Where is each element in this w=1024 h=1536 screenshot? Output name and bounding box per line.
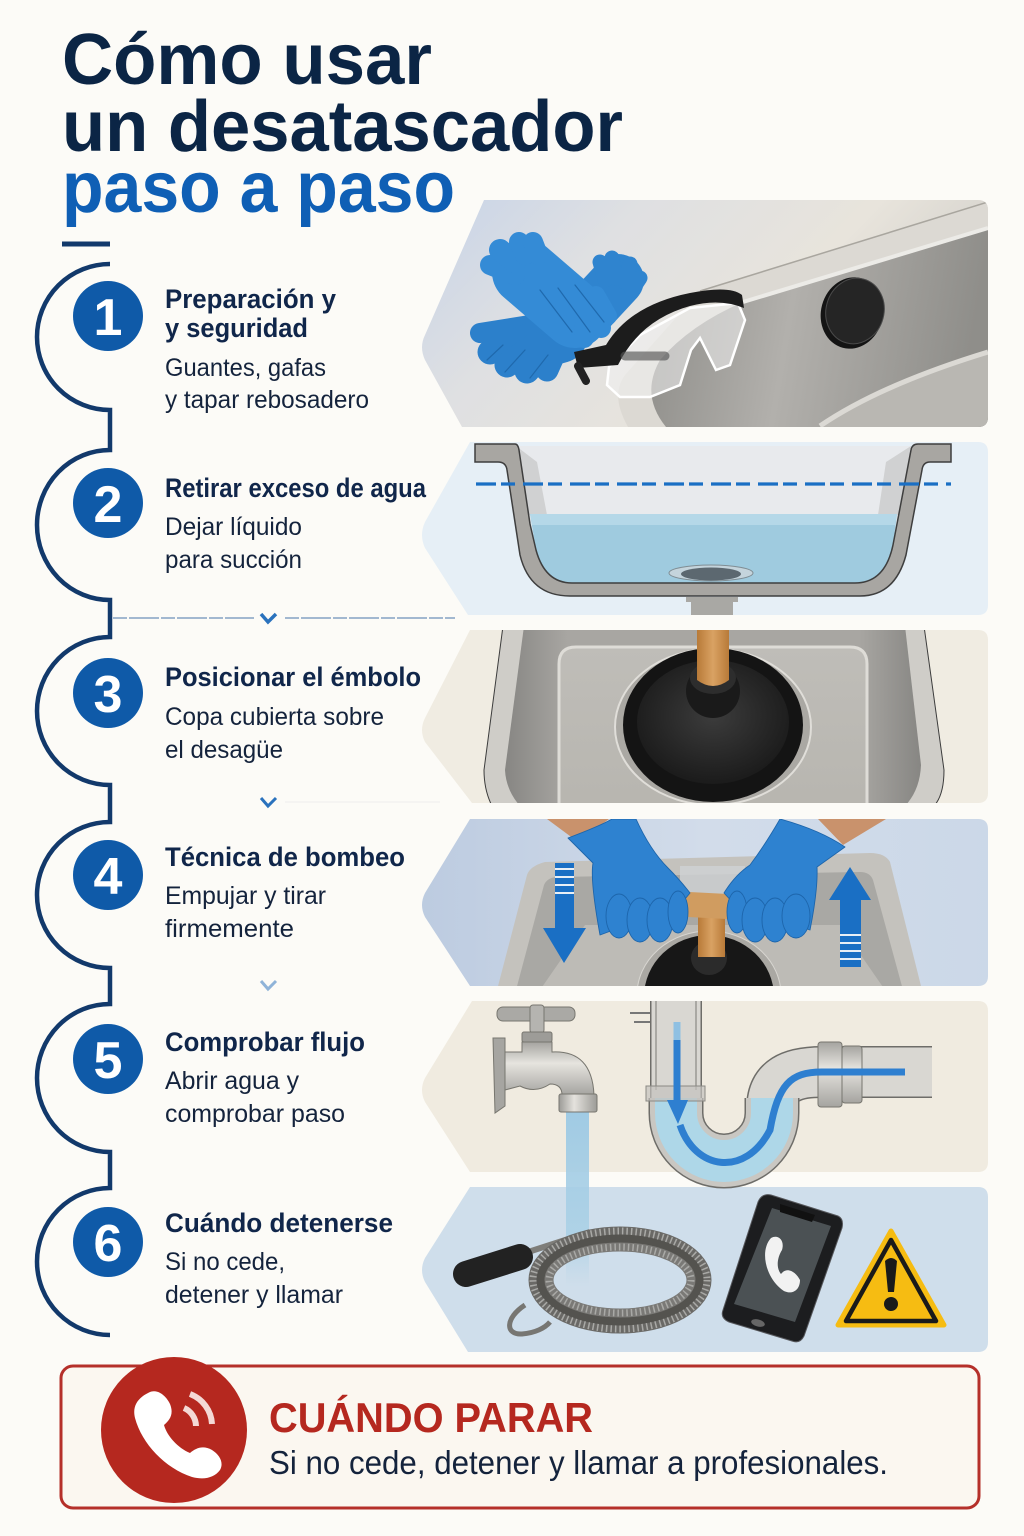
skin forearms (547, 819, 886, 845)
step 2 text: Dejar líquido (165, 513, 302, 541)
step 4 (73, 840, 405, 943)
push arrow (543, 863, 586, 963)
step 3 text: Posicionar el émbolo (165, 662, 421, 692)
step 6 text: detener y llamar (165, 1281, 343, 1309)
panel 4: pumping technique (422, 819, 988, 986)
step 6 text: Cuándo detenerse (165, 1208, 393, 1238)
step 6 text (165, 1208, 393, 1309)
title: Cómo usar (62, 20, 432, 100)
title: un desatascador (62, 87, 623, 167)
number badge 5: 5 (94, 1032, 122, 1090)
step 5 (73, 1024, 365, 1128)
steel sink (484, 630, 944, 803)
number badge 1: 1 (94, 289, 122, 347)
number badge 4: 4 (94, 848, 123, 906)
warning triangle (838, 1231, 944, 1325)
smartphone (722, 1195, 842, 1342)
step 5 text: Abrir agua y (165, 1067, 299, 1095)
icon: phone in red circle (101, 1357, 247, 1503)
step 2 (73, 468, 427, 574)
step 6 (73, 1207, 393, 1309)
number badge 5 (73, 1024, 143, 1094)
step 4 text: Empujar y tirar (165, 882, 326, 910)
step 3 text: Copa cubierta sobre (165, 703, 384, 731)
gloved hands (568, 819, 845, 942)
number badge 6: 6 (94, 1215, 122, 1273)
sink rim and basin (618, 202, 988, 427)
number badge 2: 2 (94, 476, 122, 534)
panel 3: plunger on drain (422, 630, 988, 803)
plunger (615, 626, 811, 805)
title (62, 20, 623, 228)
back glove (592, 258, 640, 308)
callout heading: CUÁNDO PARAR (269, 1394, 593, 1441)
step 3 text: el desagüe (165, 736, 283, 764)
step 2 text: Retirar exceso de agua (165, 473, 427, 503)
safety goggles (574, 289, 745, 397)
step 5 text (165, 1027, 365, 1128)
sink (497, 853, 922, 990)
number badge 1 (73, 281, 143, 351)
step 2 text (165, 473, 427, 574)
upper glove (490, 242, 608, 338)
step 5 text: comprobar paso (165, 1100, 345, 1128)
lower glove (480, 325, 560, 371)
overflow plug (820, 277, 885, 349)
step 4 text: Técnica de bombeo (165, 842, 405, 872)
step dividers (113, 614, 455, 989)
number badge 3 (73, 658, 143, 728)
panel 5: flow check background (422, 1001, 988, 1172)
callout: when to stop (61, 1357, 979, 1508)
inner basin wall (516, 446, 911, 520)
step 4 text (165, 842, 405, 943)
step 6 text: Si no cede, (165, 1248, 285, 1276)
step 1 text: Preparación y (165, 284, 336, 314)
step 3 text (165, 662, 421, 764)
step 4 text: firmemente (165, 915, 294, 943)
step 1 text: y tapar rebosadero (165, 386, 369, 414)
number badge 6 (73, 1207, 143, 1277)
dashed water line (476, 482, 951, 486)
step 1 text: y seguridad (165, 313, 308, 343)
water (530, 514, 897, 583)
blue gloves (480, 242, 640, 378)
number badge 2 (73, 468, 143, 538)
drain (669, 565, 753, 615)
step 1 text: Guantes, gafas (165, 354, 326, 382)
panel 1: gloves, goggles, overflow plug (415, 195, 995, 435)
step 1 (73, 281, 369, 414)
title: paso a paso (62, 148, 455, 228)
number badge 4 (73, 840, 143, 910)
step 3 (73, 658, 421, 764)
water stream from faucet (566, 1112, 589, 1287)
step 1 text (165, 284, 369, 414)
plunger cup (637, 892, 781, 986)
step 5 text: Comprobar flujo (165, 1027, 365, 1057)
pull arrow (829, 867, 871, 967)
sink basin section (475, 444, 951, 596)
panel 2: basin with water level (415, 438, 995, 618)
callout text: Si no cede, detener y llamar a profesionales. (269, 1444, 888, 1481)
panel 6: stop tools background (422, 1187, 988, 1352)
timeline rail (37, 244, 110, 1335)
faucet (493, 1005, 597, 1113)
drain snake (466, 1231, 707, 1334)
number badge 3: 3 (94, 666, 122, 724)
step 2 text: para succión (165, 546, 302, 574)
p-trap pipe with flow (630, 1001, 932, 1163)
